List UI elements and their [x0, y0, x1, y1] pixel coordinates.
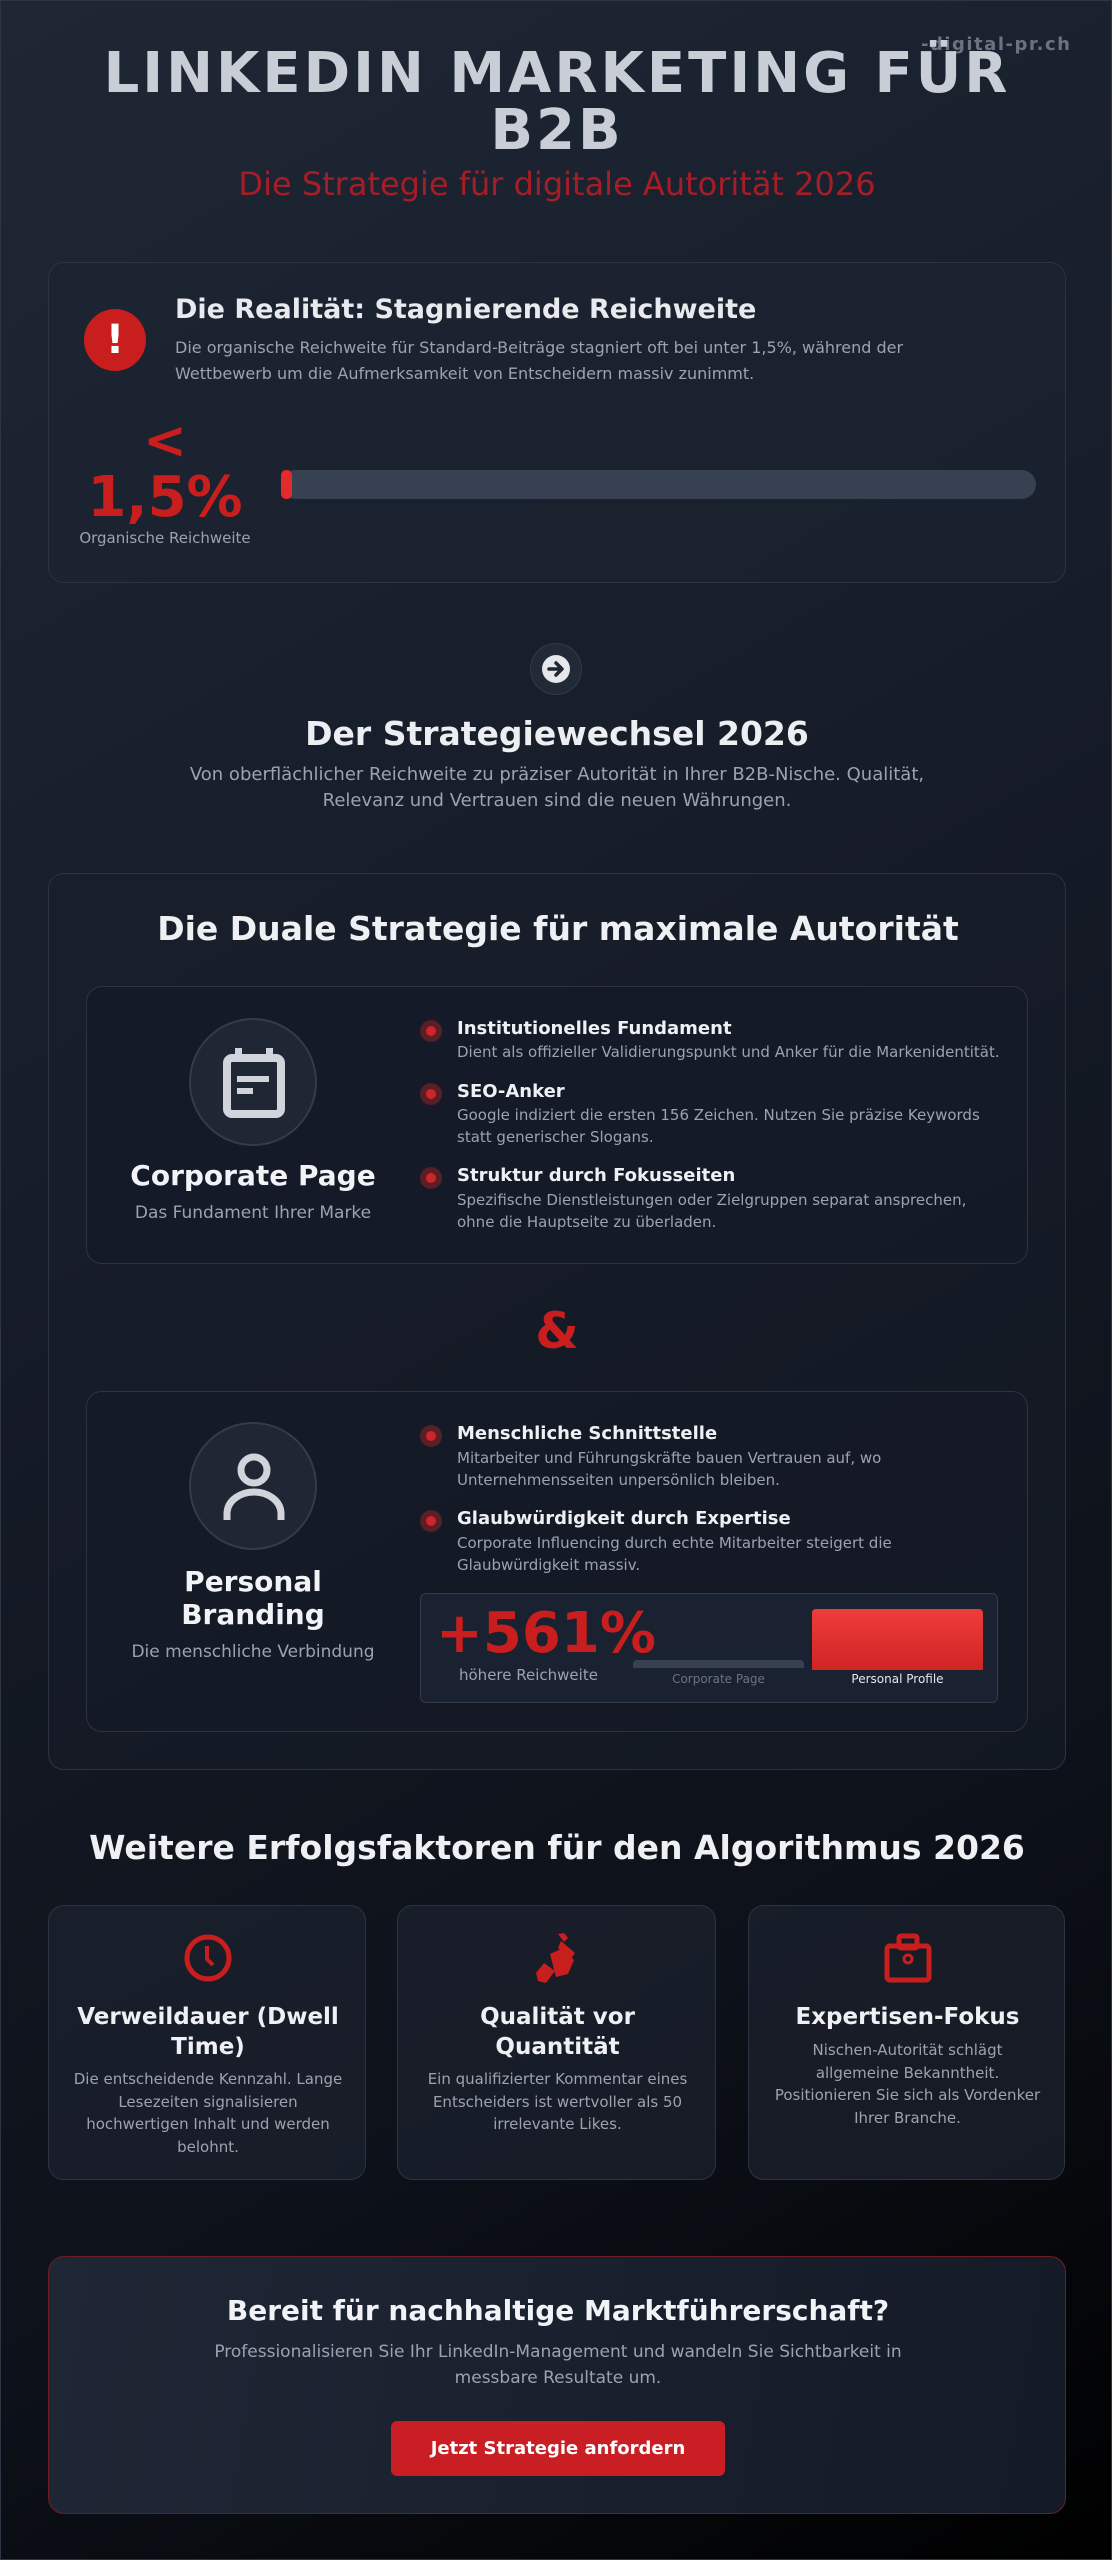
- bullet list: corporate: Google indiziert die ersten 156 Zeichen. Nutzen Sie präzise Keywords statt generischer Slogans.: [457, 1106, 980, 1146]
- caption: höhere Reichweite: [459, 1666, 598, 1684]
- icon: alert: !: [106, 317, 124, 363]
- title: B2B: [490, 98, 624, 163]
- sublabel: Die menschliche Verbindung: [131, 1642, 375, 1662]
- subtitle: Die Strategie für digitale Autorität 2026: [238, 165, 876, 203]
- stat: <: [143, 411, 187, 471]
- panel: quality: [397, 1905, 716, 2180]
- title: Qualität vor Quantität: [480, 2004, 635, 2060]
- text: Ein qualifizierter Kommentar eines Entscheiders ist wertvoller als 50 irrelevante Likes.: [428, 2070, 687, 2133]
- icon: clock: [184, 1934, 232, 1982]
- panel: corporate page: [86, 986, 1028, 1264]
- bullet list: personal: Mitarbeiter und Führungskräfte bauen Vertrauen auf, wo Unternehmensseiten unpersönlich bleiben.: [457, 1449, 881, 1489]
- stat: Organische Reichweite: [79, 529, 251, 547]
- big number: +561%: [436, 1601, 656, 1666]
- heading: shift: Der Strategiewechsel 2026: [305, 714, 809, 753]
- stat chart: +561%: Personal Profile: [851, 1672, 944, 1686]
- label: Corporate Page: [130, 1159, 376, 1192]
- panel: personal branding: [86, 1391, 1028, 1732]
- label: [181, 1565, 325, 1631]
- watermark: -digital-pr.ch: [921, 34, 1072, 55]
- bullet list: personal: Corporate Influencing durch echte Mitarbeiter steigert die Glaubwürdigkeit massiv.: [457, 1534, 892, 1574]
- icon: person: [189, 1422, 317, 1550]
- panel: dual strategy: [48, 873, 1066, 1770]
- bullet list: personal: [420, 1423, 892, 1574]
- button: [391, 2421, 725, 2476]
- panel: dwell time: [48, 1905, 366, 2180]
- icon: alert: [84, 309, 146, 371]
- panel: reality: [48, 262, 1066, 583]
- bullet list: corporate: Struktur durch Fokusseiten: [457, 1165, 735, 1186]
- panel: call to action: [48, 2256, 1066, 2514]
- button: Jetzt Strategie anfordern: [431, 2438, 685, 2459]
- heading: Die Duale Strategie für maximale Autorität: [157, 909, 959, 948]
- bar: corporate: [633, 1660, 804, 1668]
- icon: gavel: [536, 1933, 575, 1983]
- text: Nischen-Autorität schlägt allgemeine Bekanntheit. Positionieren Sie sich als Vordenker Ihrer Branche.: [775, 2041, 1040, 2126]
- heading: factors: Weitere Erfolgsfaktoren für den Algorithmus 2026: [89, 1828, 1025, 1867]
- heading: Bereit für nachhaltige Marktführerschaft?: [227, 2294, 889, 2327]
- ampersand: &: [535, 1302, 579, 1360]
- bullet list: corporate: Spezifische Dienstleistungen oder Zielgruppen separat ansprechen, ohne die Hauptseite zu überladen.: [457, 1191, 966, 1231]
- bullet list: personal: Menschliche Schnittstelle: [457, 1423, 717, 1444]
- bullet list: corporate: [420, 1018, 1000, 1231]
- stat chart: +561%: [420, 1593, 998, 1703]
- title: [104, 40, 1010, 163]
- bar: personal: [812, 1609, 983, 1670]
- icon: arrow: [530, 643, 582, 695]
- bullet list: corporate: SEO-Anker: [457, 1081, 565, 1102]
- icon: calendar: [189, 1018, 317, 1146]
- label: Branding: [181, 1598, 325, 1631]
- bullet list: corporate: Institutionelles Fundament: [457, 1018, 732, 1039]
- bar chart: [281, 470, 1036, 499]
- stat chart: +561%: Corporate Page: [672, 1672, 765, 1686]
- title: Verweildauer (Dwell Time): [77, 2004, 339, 2060]
- icon: briefcase: [884, 1934, 932, 1982]
- bullet list: personal: Glaubwürdigkeit durch Expertise: [457, 1508, 791, 1529]
- text: Die organische Reichweite für Standard-Beiträge stagniert oft bei unter 1,5%, während der Wettbewerb um die Aufmerksamkeit von Entscheidern massiv zunimmt.: [175, 338, 903, 383]
- title: Expertisen-Fokus: [796, 2004, 1019, 2030]
- panel: expertise: [748, 1905, 1065, 2180]
- bullet list: corporate: Dient als offizieller Validierungspunkt und Anker für die Markenidentität.: [457, 1043, 1000, 1061]
- text: Die entscheidende Kennzahl. Lange Lesezeiten signalisieren hochwertigen Inhalt und werden belohnt.: [74, 2070, 342, 2156]
- text: Professionalisieren Sie Ihr LinkedIn-Management und wandeln Sie Sichtbarkeit in messbare Resultate um.: [214, 2342, 902, 2388]
- title: LINKEDIN MARKETING FÜR: [104, 41, 1010, 106]
- text: shift: Von oberflächlicher Reichweite zu präziser Autorität in Ihrer B2B-Nische. Qualität, Relevanz und Vertrauen sind die neuen Währungen.: [190, 764, 924, 811]
- sublabel: Das Fundament Ihrer Marke: [135, 1203, 371, 1223]
- label: Personal: [184, 1565, 322, 1598]
- stat: [79, 411, 251, 547]
- heading: Die Realität: Stagnierende Reichweite: [175, 294, 756, 325]
- stat: 1,5%: [87, 465, 243, 530]
